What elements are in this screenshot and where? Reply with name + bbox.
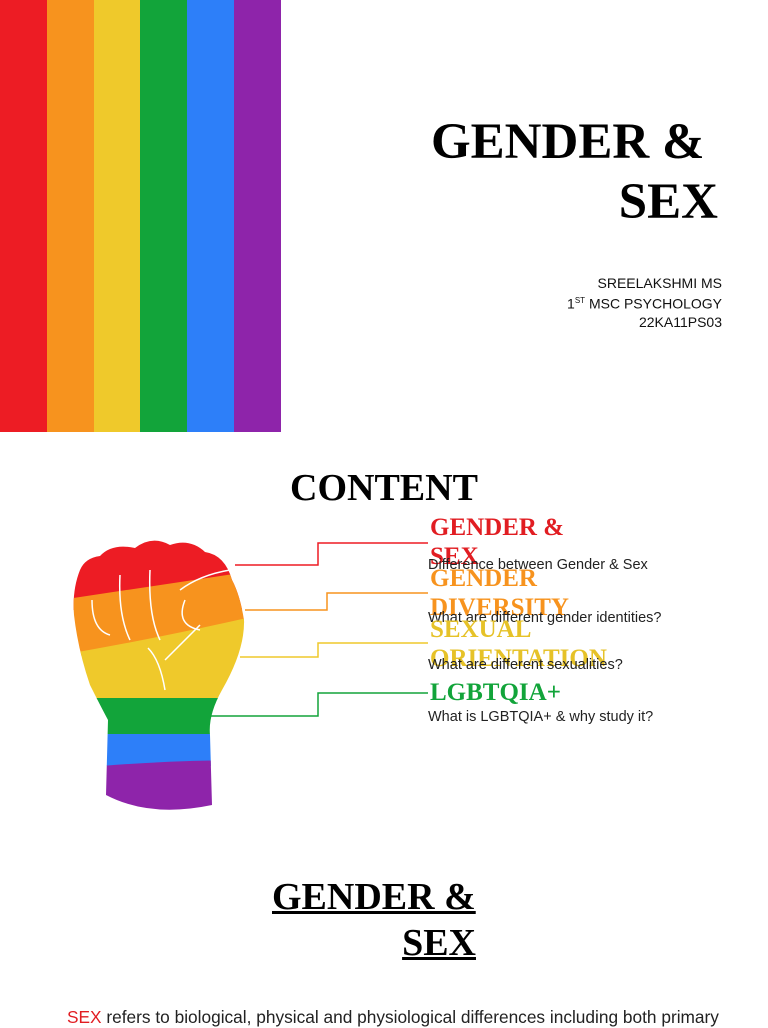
section heading: SEX [402,922,476,964]
body text: SEX refers to biological, physical and physiological differences including both primary [67,1007,719,1027]
item: gender diversity [430,565,569,621]
author info [567,275,722,330]
item: gender diversity: GENDER [430,565,537,592]
item: gender & sex: SEX [430,543,479,570]
fist illustration with connectors [74,540,428,810]
item: gender & sex: GENDER & [430,514,564,541]
desc 4: What is LGBTQIA+ & why study it? [428,709,653,725]
section heading: GENDER & [272,876,476,918]
desc 1: Difference between Gender & Sex [428,557,648,573]
author info: SREELAKSHMI MS [598,275,722,291]
item: gender diversity: DIVERSITY [430,594,569,621]
title: SEX [619,174,718,230]
title [431,114,718,230]
section heading [272,876,476,964]
desc 2: What are different gender identities? [428,610,662,626]
item: gender & sex [430,514,564,570]
item: sexual orientation: SEXUAL [430,616,531,643]
item: sexual orientation [430,616,607,672]
desc 3: What are different sexualities? [428,657,623,673]
item: lgbtqia: LGBTQIA+ [430,679,561,706]
author info: 1ST MSC PSYCHOLOGY [567,296,722,312]
content heading: CONTENT [290,467,478,509]
item: sexual orientation: ORIENTATION [430,645,607,672]
title: GENDER & [431,114,704,170]
author info: 22KA11PS03 [639,314,722,330]
rainbow stripes [0,0,281,432]
